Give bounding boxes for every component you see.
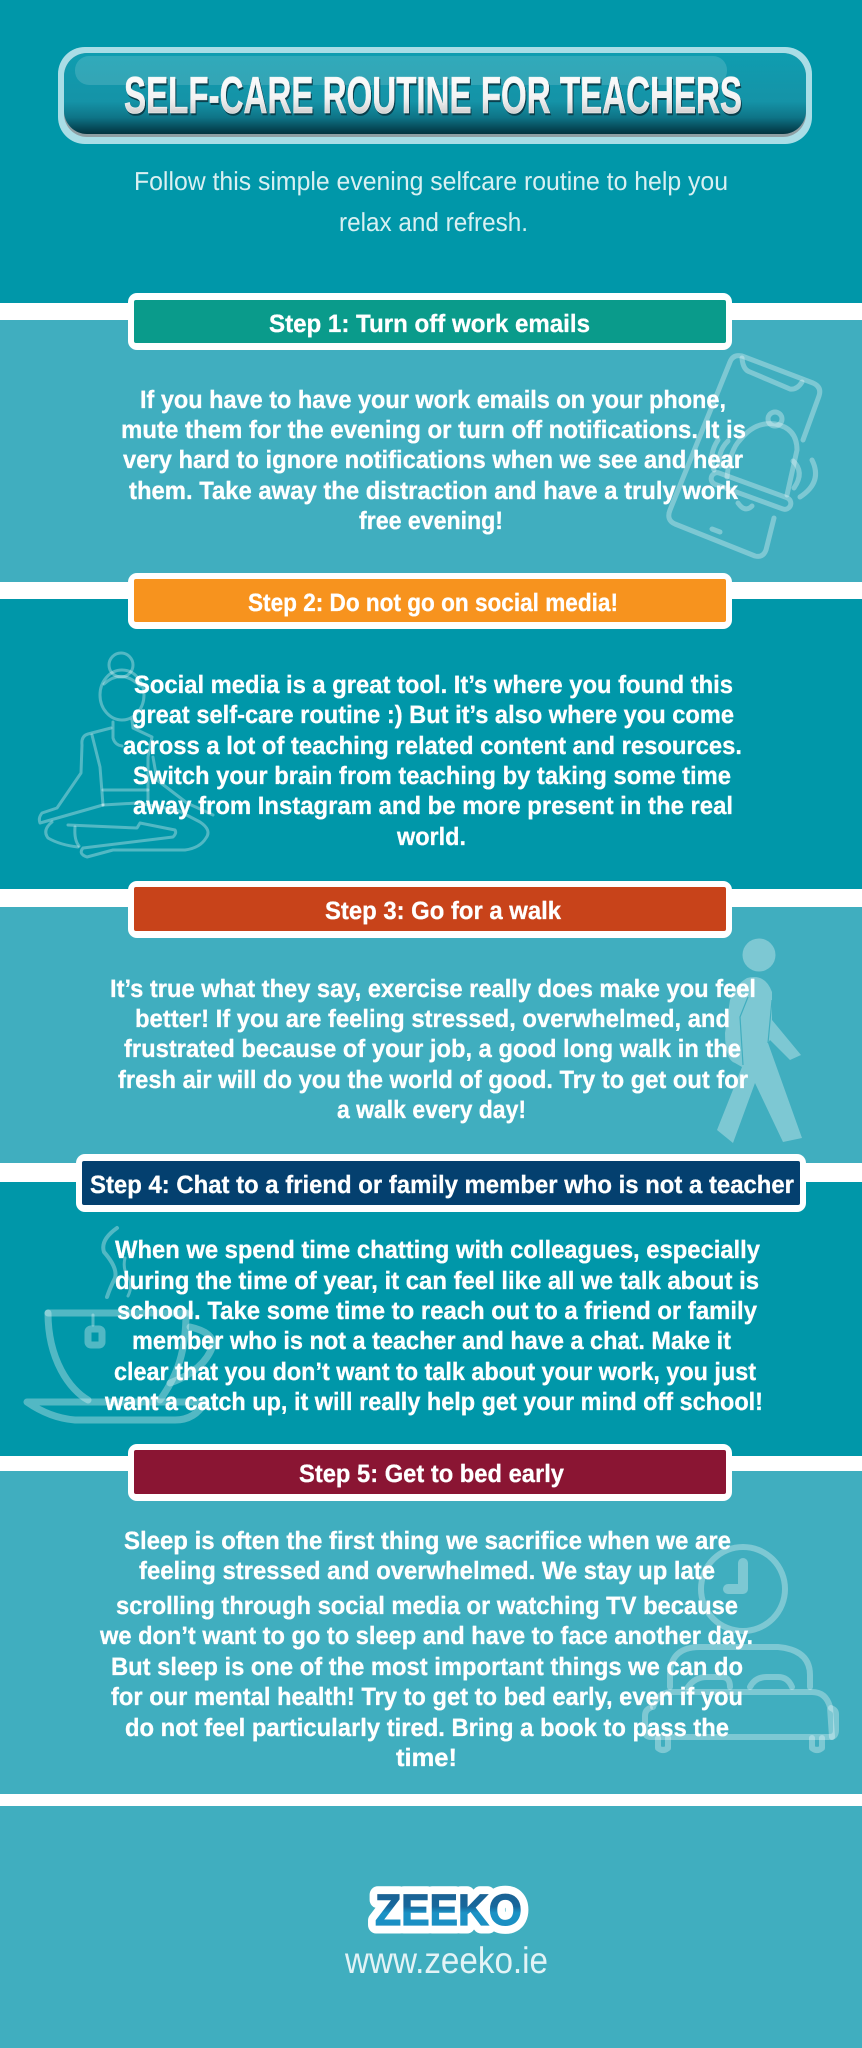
icon: clock and bed — [645, 1547, 836, 1750]
intro text — [134, 166, 728, 237]
step 1 text — [121, 386, 746, 535]
step 1 text: free evening! — [359, 507, 503, 535]
step 4 text: member who is not a teacher and have a chat. Make it — [132, 1327, 732, 1355]
intro text: relax and refresh. — [339, 207, 528, 237]
step 5 text: we don’t want to go to sleep and have to face another day. — [99, 1622, 753, 1650]
step 3 text: a walk every day! — [337, 1096, 526, 1124]
background: top section — [0, 0, 862, 303]
website url: www.zeeko.ie — [344, 1940, 548, 1981]
step 4 label: Step 4: Chat to a friend or family member who is not a teacher — [90, 1171, 794, 1199]
icon: meditating figure — [39, 653, 213, 857]
intro text: Follow this simple evening selfcare routine to help you — [134, 166, 728, 196]
panel: step 4 background — [0, 1182, 862, 1456]
step 3 label — [128, 881, 732, 938]
step 4 text: school. Take some time to reach out to a friend or family — [117, 1297, 757, 1325]
step 2 text: Social media is a great tool. It’s where you found this — [134, 671, 733, 699]
step 5 text: But sleep is one of the most important things we can do — [111, 1653, 743, 1681]
step 3 text: fresh air will do you the world of good. Try to get out for — [118, 1066, 748, 1094]
step 2 text: great self-care routine :) But it’s also where you come — [132, 701, 734, 729]
step 1 text: If you have to have your work emails on your phone, — [140, 386, 726, 414]
step 4 text: When we spend time chatting with colleagues, especially — [115, 1236, 760, 1264]
step 3 text: better! If you are feeling stressed, overwhelmed, and — [135, 1005, 730, 1033]
logo: ZEEKO: ZEEKO — [375, 1886, 522, 1935]
step 3 text: It’s true what they say, exercise really does make you feel — [110, 975, 756, 1003]
step 5 text — [99, 1527, 753, 1772]
icon: phone with ringing bell — [669, 356, 820, 556]
step 1 text: them. Take away the distraction and have a truly work — [129, 477, 738, 505]
step 5 label: Step 5: Get to bed early — [299, 1460, 564, 1488]
step 5 label — [128, 1444, 732, 1501]
step 5 text: feeling stressed and overwhelmed. We stay up late — [139, 1557, 715, 1585]
panel: footer background — [0, 1806, 862, 2048]
step 2 text: world. — [396, 823, 466, 851]
step 3 text: frustrated because of your job, a good long walk in the — [124, 1035, 741, 1063]
logo: ZEEKO: ZEEKO — [375, 1886, 522, 1935]
step 4 text: during the time of year, it can feel like all we talk about is — [115, 1267, 759, 1295]
step 2 text: across a lot of teaching related content and resources. — [123, 732, 742, 760]
step 2 text: away from Instagram and be more present in the real — [133, 792, 733, 820]
step 5 text: scrolling through social media or watching TV because — [116, 1592, 738, 1620]
step 1 label — [128, 293, 732, 350]
panel: step 3 background — [0, 907, 862, 1163]
step 5 text: do not feel particularly tired. Bring a book to pass the — [125, 1714, 729, 1742]
step 1 text: mute them for the evening or turn off notifications. It is — [121, 416, 746, 444]
step 4 text — [104, 1236, 763, 1416]
step 5 text: Sleep is often the first thing we sacrifice when we are — [124, 1527, 731, 1555]
step 1 text: very hard to ignore notifications when we see and hear — [123, 446, 743, 474]
step 3 text — [110, 975, 756, 1124]
title banner — [58, 47, 812, 144]
step 1 label: Step 1: Turn off work emails — [269, 310, 590, 338]
step 4 text: clear that you don’t want to talk about your work, you just — [114, 1358, 757, 1386]
step 5 text: time! — [396, 1744, 457, 1772]
step 4 text: want a catch up, it will really help get your mind off school! — [104, 1388, 763, 1416]
step 2 label — [128, 573, 732, 629]
step 2 text — [123, 671, 742, 851]
step 2 label: Step 2: Do not go on social media! — [248, 589, 618, 617]
panel: step 2 background — [0, 599, 862, 889]
icon: walking person — [717, 938, 802, 1143]
icon: tea cup — [27, 1228, 213, 1420]
panel: step 1 background — [0, 320, 862, 582]
panel: step 5 background — [0, 1471, 862, 1794]
step 2 text: Switch your brain from teaching by taking some time — [133, 762, 731, 790]
step 5 text: for our mental health! Try to get to bed early, even if you — [111, 1683, 743, 1711]
step 3 label: Step 3: Go for a walk — [325, 897, 561, 925]
step 4 label — [76, 1154, 806, 1212]
